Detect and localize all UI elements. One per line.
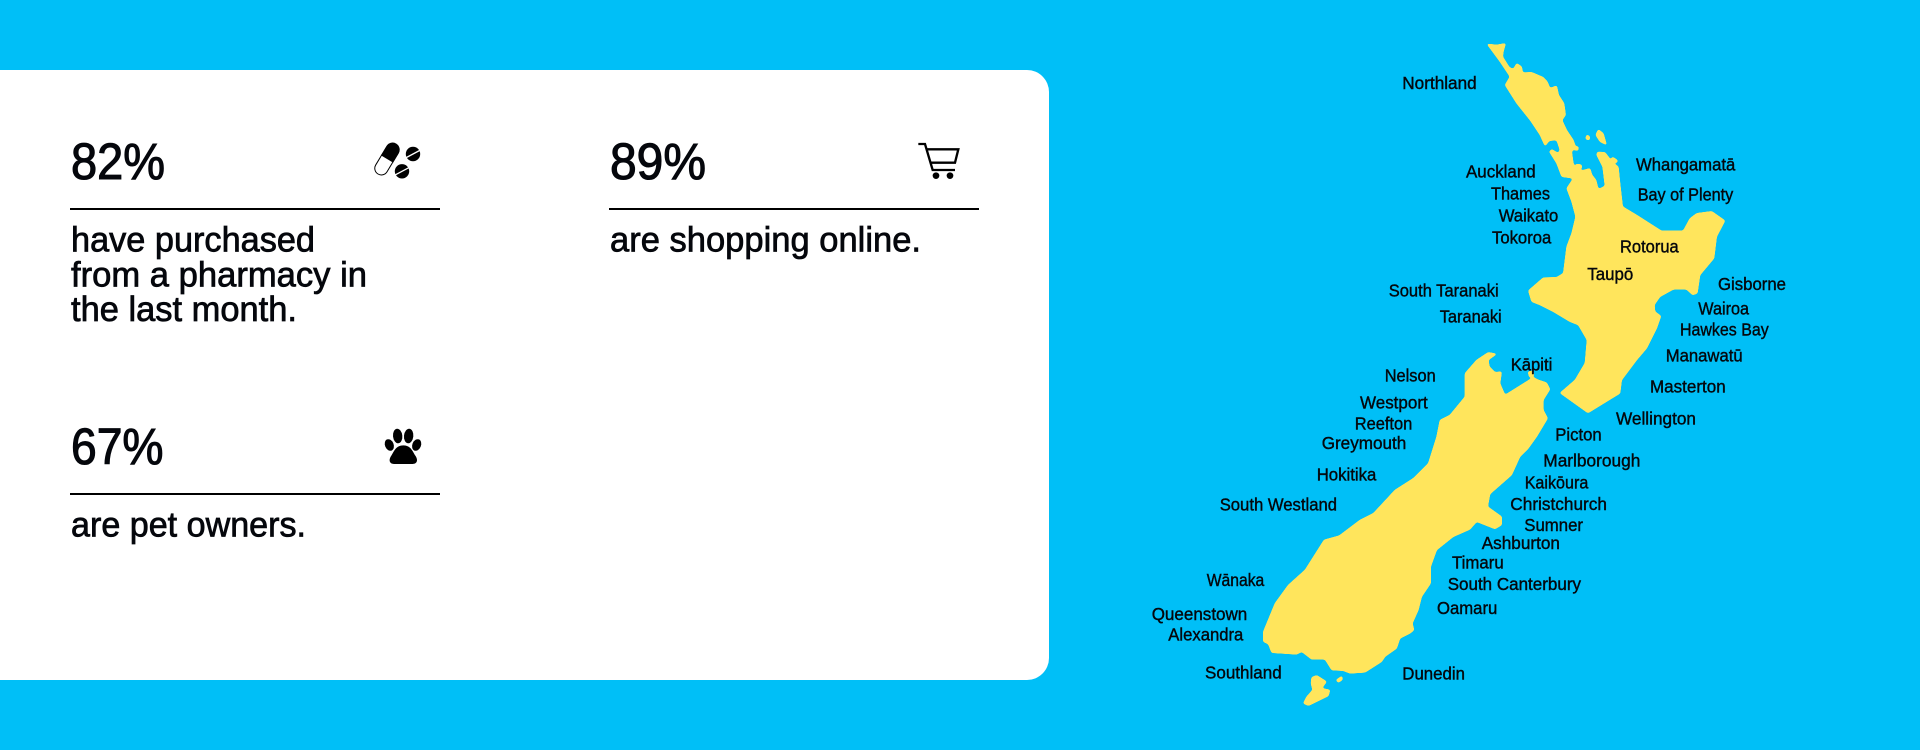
label: Reefton: Reefton [1355, 413, 1412, 433]
stat: pharmacy [70, 133, 440, 329]
stat: online shopping [609, 133, 979, 260]
North Island [1487, 43, 1725, 413]
label: Thames: Thames [1491, 183, 1550, 203]
label: Oamaru: Oamaru [1437, 598, 1497, 618]
label: Southland: Southland [1205, 663, 1282, 683]
label: Wairoa: Wairoa [1698, 298, 1749, 318]
label: Christchurch: Christchurch [1510, 494, 1607, 514]
label: Dunedin: Dunedin [1402, 664, 1465, 684]
text: online shopping description: are shopping online. [610, 221, 921, 260]
text: pharmacy description: have purchased [71, 221, 315, 260]
label: Alexandra: Alexandra [1168, 625, 1244, 645]
text: pharmacy description: from a pharmacy in [71, 256, 367, 295]
panel: statistics card [0, 70, 1049, 680]
label: Masterton: Masterton [1650, 376, 1726, 396]
number: 82%: 82% [71, 133, 165, 190]
text: pharmacy description [71, 221, 367, 329]
label: Wānaka: Wānaka [1207, 570, 1265, 590]
icon: pills [372, 140, 420, 178]
label: Nelson: Nelson [1385, 366, 1436, 386]
text: pharmacy description: the last month. [71, 290, 297, 329]
text: pet owners description: are pet owners. [71, 506, 306, 545]
label: South Westland: South Westland [1220, 494, 1337, 514]
label: Hawkes Bay: Hawkes Bay [1680, 319, 1769, 339]
region labels [1152, 73, 1786, 684]
label: Gisborne: Gisborne [1718, 274, 1786, 294]
number: 89%: 89% [610, 133, 706, 190]
stat: pet owners [70, 418, 440, 545]
label: Timaru: Timaru [1452, 552, 1504, 572]
label: Greymouth: Greymouth [1322, 433, 1406, 453]
label: South Taranaki: South Taranaki [1389, 281, 1499, 301]
label: Waikato: Waikato [1499, 206, 1558, 226]
label: Rotorua: Rotorua [1620, 237, 1679, 257]
label: Kāpiti: Kāpiti [1511, 355, 1552, 375]
label: Queenstown: Queenstown [1152, 604, 1247, 624]
label: Manawatū: Manawatū [1666, 345, 1743, 365]
map: New Zealand [1152, 43, 1786, 706]
landmass [1263, 43, 1725, 706]
label: Bay of Plenty: Bay of Plenty [1638, 185, 1734, 205]
label: Whangamatā: Whangamatā [1636, 155, 1736, 175]
label: Auckland: Auckland [1466, 161, 1536, 181]
icon: shopping cart [918, 144, 958, 179]
label: Westport: Westport [1360, 392, 1428, 412]
divider [70, 493, 440, 495]
label: Marlborough: Marlborough [1543, 450, 1640, 470]
label: Hokitika: Hokitika [1317, 464, 1377, 484]
number: 67%: 67% [71, 418, 164, 475]
label: Picton: Picton [1555, 424, 1602, 444]
label: Ashburton: Ashburton [1482, 533, 1560, 553]
label: South Canterbury: South Canterbury [1448, 574, 1581, 594]
label: Wellington: Wellington [1616, 409, 1696, 429]
card background [0, 70, 1049, 680]
divider [609, 208, 979, 210]
label: Taranaki: Taranaki [1440, 307, 1502, 327]
label: Tokoroa: Tokoroa [1492, 227, 1552, 247]
icon: paw print [383, 428, 423, 464]
divider [70, 208, 440, 210]
label: Taupō: Taupō [1587, 264, 1633, 284]
label: Northland: Northland [1402, 73, 1477, 93]
label: Kaikōura: Kaikōura [1525, 472, 1589, 492]
South Island [1263, 352, 1550, 706]
label: Sumner: Sumner [1524, 515, 1583, 535]
